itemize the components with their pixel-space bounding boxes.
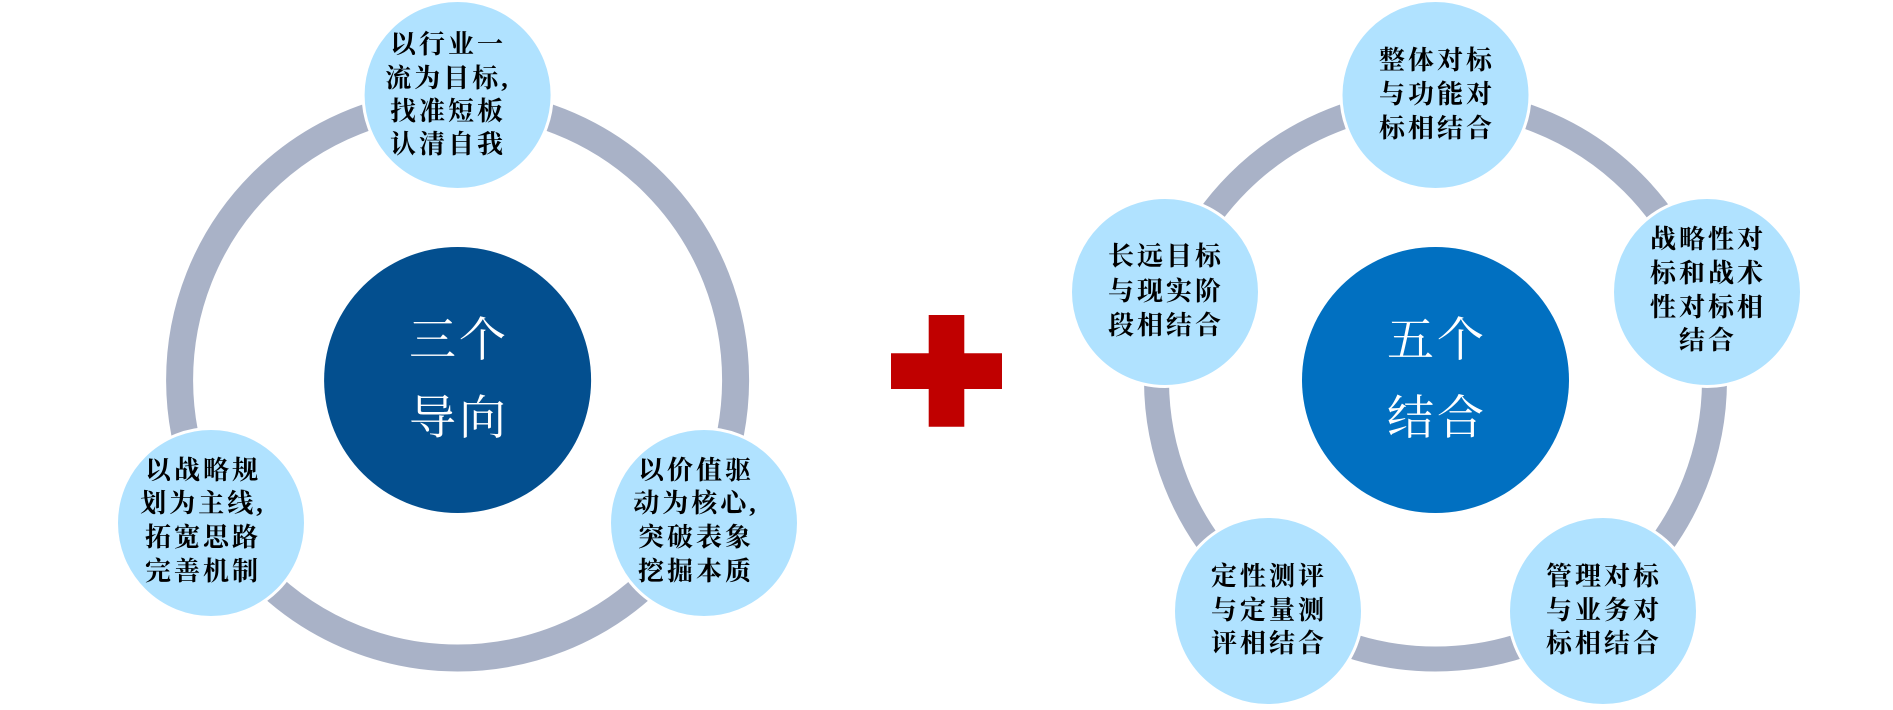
node: strategic and tactical [1612, 198, 1802, 386]
node: value driven [610, 428, 798, 618]
node: industry benchmark: 流为目标, [385, 63, 511, 93]
node: strategic planning [116, 428, 306, 618]
center circle: five combinations: 结合 [1387, 393, 1487, 445]
center circle: three orientations [324, 247, 591, 513]
node: industry benchmark: 找准短板 [390, 96, 506, 126]
node: qualitative and quantitative: 与定量测 [1211, 596, 1327, 625]
node: qualitative and quantitative: 定性测评 [1211, 562, 1327, 591]
center circle: three orientations: 导向 [409, 393, 509, 445]
node: long-term and present: 长远目标 [1108, 241, 1224, 271]
icon: red plus [891, 315, 1002, 427]
node: strategic and tactical: 性对标相 [1650, 292, 1766, 322]
center circle: five combinations: 五个 [1387, 315, 1487, 367]
node: overall and functional: 与功能对 [1379, 80, 1495, 109]
node: strategic planning: 划为主线, [140, 489, 266, 518]
node: management and business [1508, 516, 1698, 706]
node: overall and functional [1341, 0, 1530, 190]
center circle: three orientations: 三个 [409, 315, 509, 367]
node: long-term and present: 与现实阶 [1108, 277, 1224, 306]
node: value driven: 挖掘本质 [638, 556, 754, 586]
node: overall and functional: 标相结合 [1379, 113, 1495, 143]
node: strategic and tactical: 战略性对 [1650, 225, 1766, 254]
node: management and business: 与业务对 [1546, 596, 1662, 625]
node: industry benchmark [363, 0, 552, 190]
node: value driven: 突破表象 [638, 523, 754, 552]
node: strategic planning: 拓宽思路 [145, 522, 261, 552]
center circle: five combinations [1302, 247, 1569, 513]
node: qualitative and quantitative [1174, 516, 1362, 706]
node: management and business: 管理对标 [1546, 561, 1662, 591]
node: industry benchmark: 认清自我 [390, 130, 506, 159]
diagram: three orientations [116, 0, 798, 658]
node: value driven: 动为核心, [633, 488, 759, 518]
ring: left cycle [180, 102, 736, 658]
node: industry benchmark: 以行业一 [390, 30, 506, 59]
node: long-term and present: 段相结合 [1108, 311, 1224, 340]
node: strategic and tactical: 标和战术 [1650, 258, 1766, 288]
node: strategic planning: 以战略规 [145, 456, 261, 485]
diagram: five combinations [1070, 0, 1802, 706]
node: management and business: 标相结合 [1546, 628, 1662, 658]
node: long-term and present [1070, 198, 1260, 386]
node: value driven: 以价值驱 [638, 456, 754, 485]
node: qualitative and quantitative: 评相结合 [1211, 629, 1327, 658]
node: overall and functional: 整体对标 [1379, 45, 1495, 75]
node: strategic planning: 完善机制 [145, 557, 261, 586]
node: strategic and tactical: 结合 [1679, 326, 1737, 355]
ring: right cycle [1156, 101, 1714, 659]
